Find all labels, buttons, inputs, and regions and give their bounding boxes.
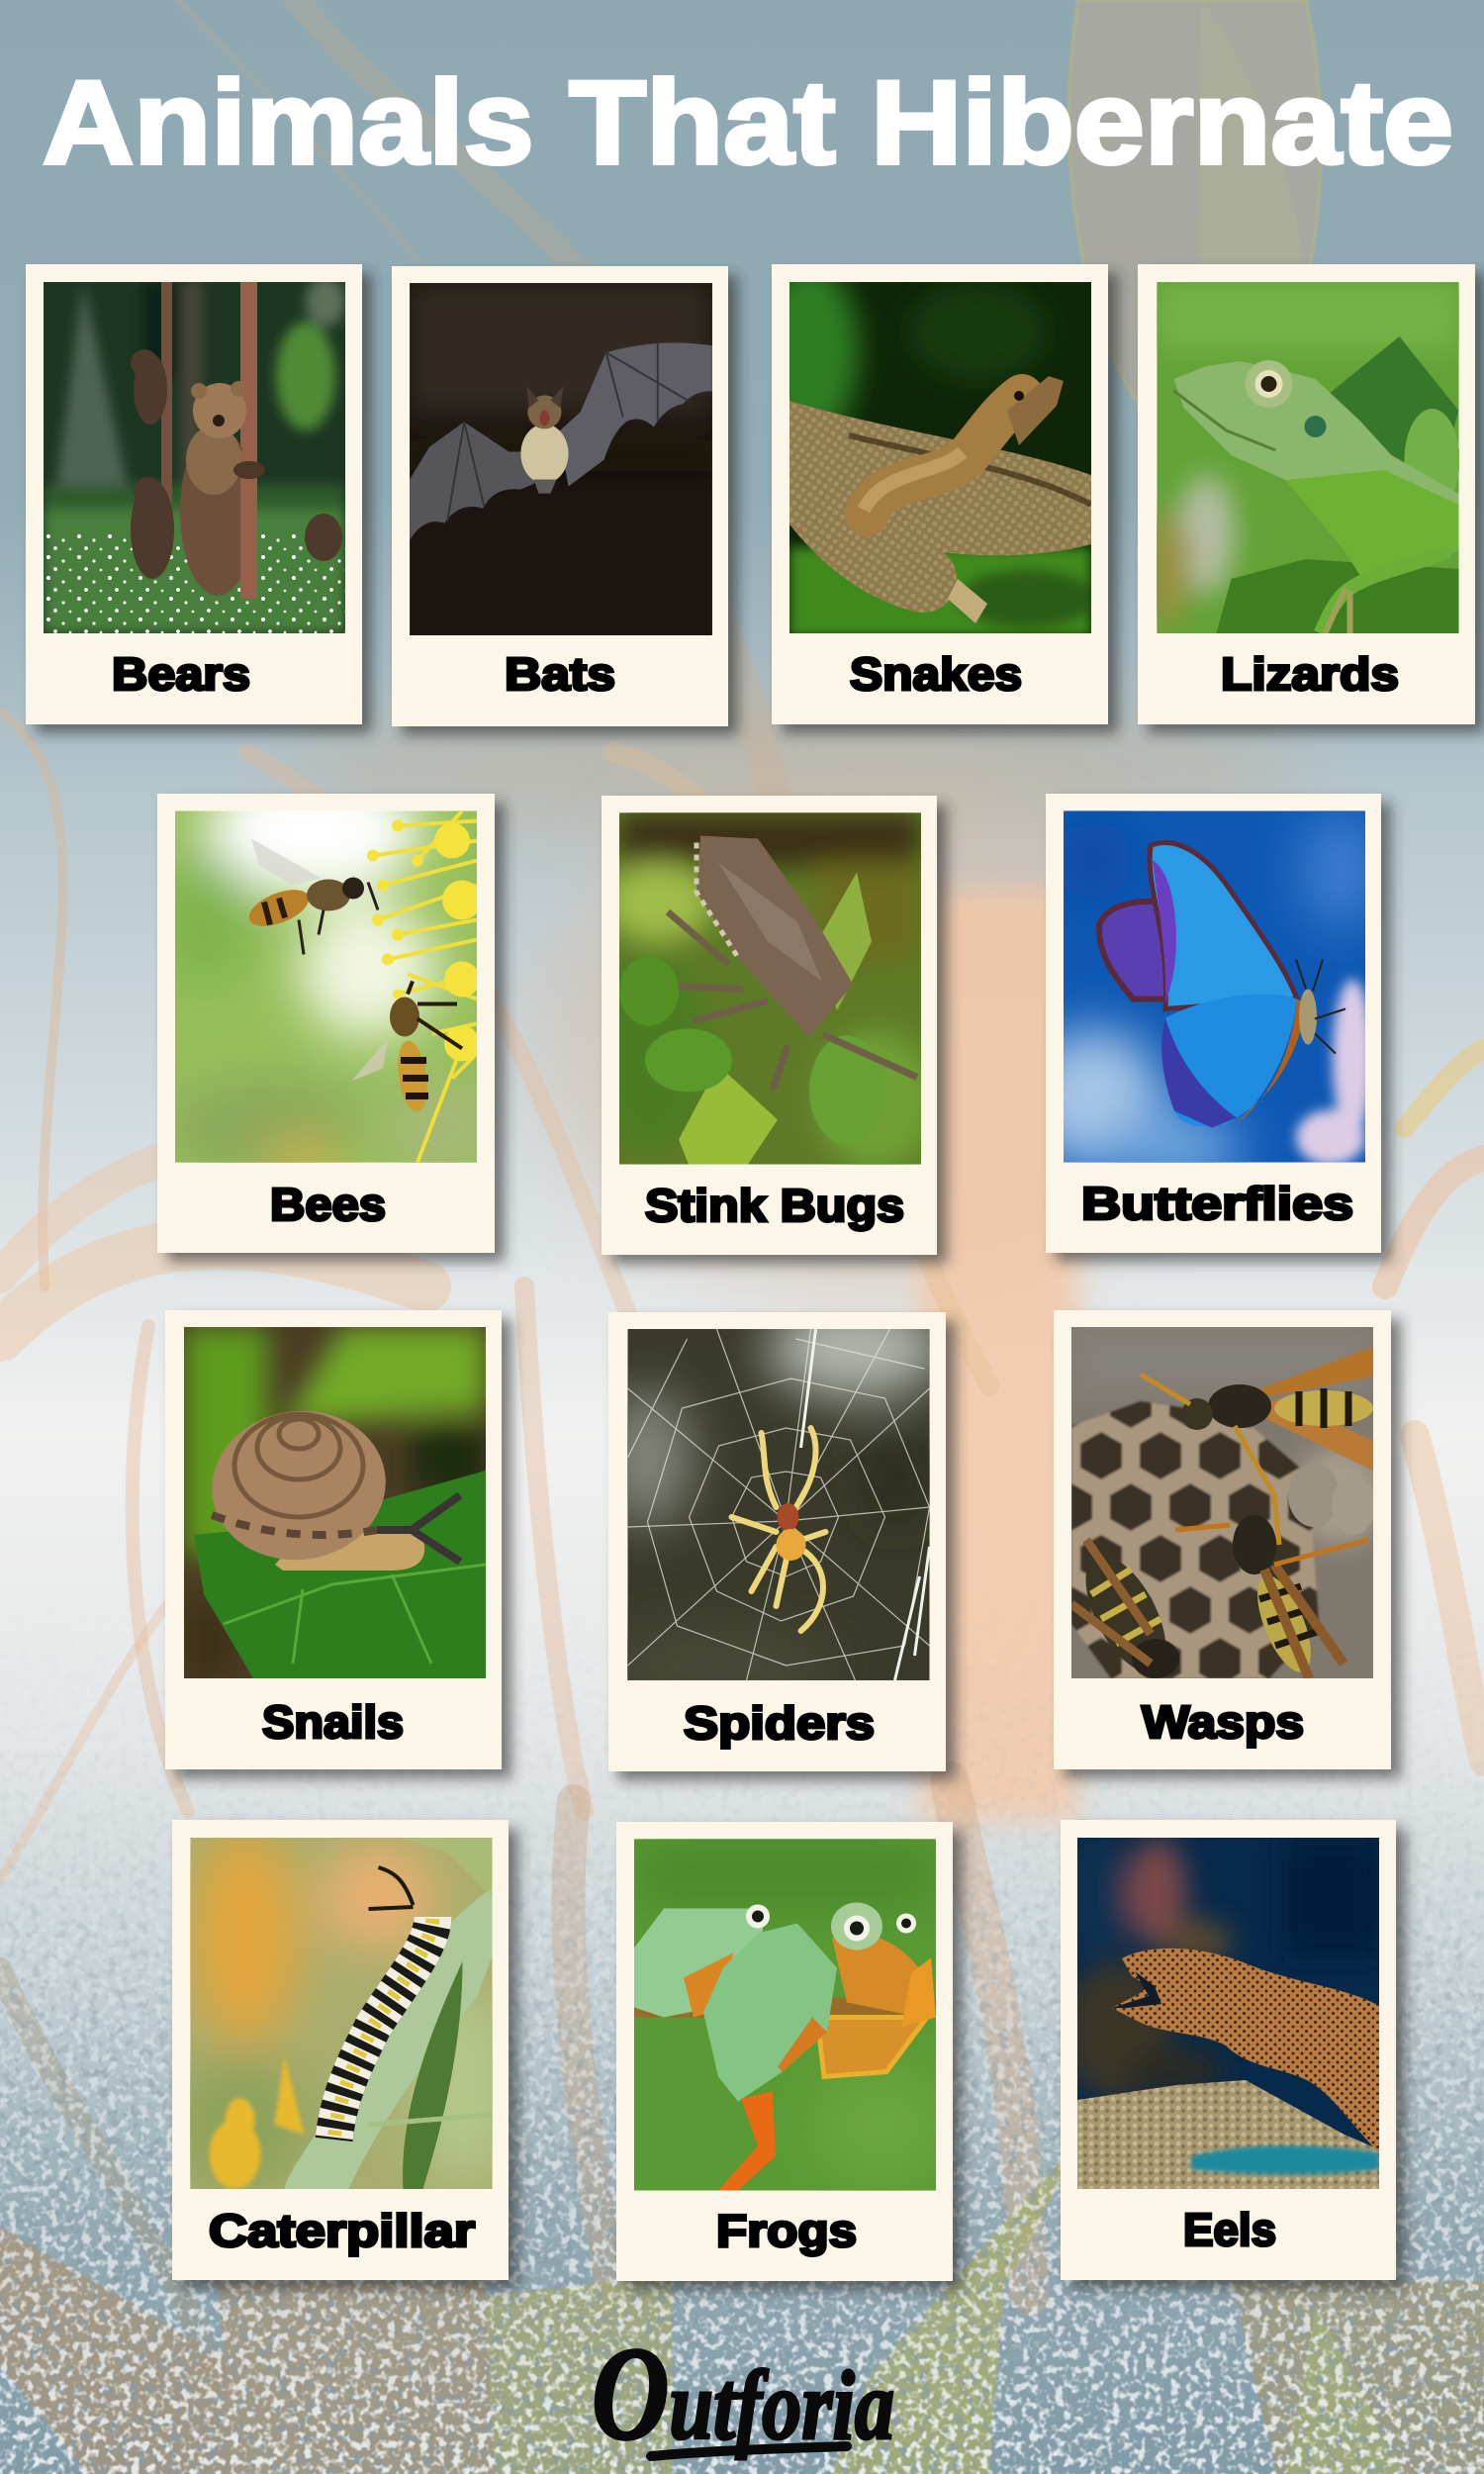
card: Bats: [392, 266, 728, 726]
photo: wasps on nest: [1071, 1327, 1373, 1678]
label: Snakes: Snakes: [850, 648, 1022, 700]
photo: tree frogs: [634, 1839, 936, 2191]
photo: snail on leaf: [184, 1327, 486, 1678]
card: Frogs: [616, 1822, 953, 2281]
lower wasp parts: [1175, 1515, 1368, 1679]
card: Stink Bugs: [590, 796, 937, 1255]
label: Bees: Bees: [270, 1179, 386, 1230]
card: Snakes: [760, 262, 1108, 724]
label: Lizards: Lizards: [1221, 648, 1399, 700]
photo: bat in flight: [410, 283, 712, 635]
photo: blue morpho butterfly: [1064, 810, 1365, 1163]
photo: bears in forest: [44, 282, 345, 633]
logo: Outforia: Outforia: [592, 2321, 894, 2468]
card: Bees: [155, 766, 502, 1253]
photo: caterpillar on leaf: [190, 1838, 493, 2189]
photo: green lizard: [1157, 282, 1459, 633]
card: Snails: [165, 1310, 502, 1769]
photo: spider in web: [627, 1329, 930, 1680]
top wasp parts: [1141, 1347, 1373, 1545]
label: Butterflies: Butterflies: [1081, 1178, 1353, 1229]
photo: stink bug on leaves: [619, 812, 921, 1165]
label: Bears: Bears: [112, 648, 250, 700]
label: Bats: Bats: [505, 648, 615, 700]
label: Snails: Snails: [262, 1696, 404, 1748]
label: Caterpillar: Caterpillar: [209, 2205, 475, 2256]
card: Caterpillar: [170, 1820, 512, 2280]
label: Spiders: Spiders: [684, 1697, 875, 1749]
label: Wasps: Wasps: [1142, 1696, 1304, 1748]
card: Lizards: [1138, 264, 1475, 724]
left wasp parts: [1069, 1540, 1182, 1684]
upper bee parts: [244, 839, 378, 954]
card: Eels: [1061, 1820, 1396, 2280]
photo: moray eel: [1077, 1838, 1379, 2189]
label: Eels: Eels: [1183, 2204, 1276, 2255]
title: Animals That Hibernate: [43, 56, 1453, 189]
label: Frogs: Frogs: [716, 2205, 857, 2256]
card: Bears: [26, 264, 362, 724]
card: Wasps: [1054, 1310, 1391, 1769]
photo: coiled snake: [789, 282, 1091, 633]
lower bee parts: [351, 982, 462, 1113]
label: Stink Bugs: Stink Bugs: [645, 1180, 904, 1231]
card: Butterflies: [1024, 794, 1381, 1253]
photo: bees and flowers: [175, 810, 477, 1163]
card: Spiders: [598, 1299, 946, 1771]
